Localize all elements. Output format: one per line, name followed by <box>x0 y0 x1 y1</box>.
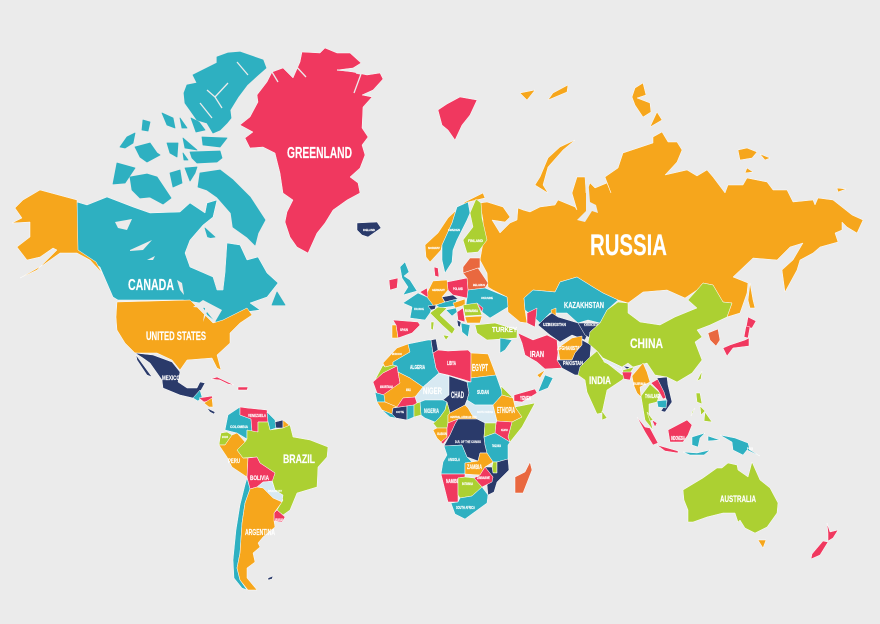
country: Norway: NORWAY <box>428 246 440 250</box>
country: Kyrgyzstan <box>578 323 600 338</box>
europe <box>389 193 508 340</box>
lake: Winnipeg <box>177 280 184 295</box>
country: China: CHINA <box>630 335 663 351</box>
country: Turkey: TURKEY <box>492 327 517 334</box>
country: Ireland <box>389 278 398 290</box>
country: Myanmar <box>632 363 650 397</box>
north america <box>12 52 285 414</box>
country: Syria <box>500 338 512 353</box>
country: Costa Rica <box>204 398 213 407</box>
country: Korea <box>708 329 720 346</box>
country: Uruguay: URUGUAY <box>275 518 283 522</box>
country: Panama <box>207 408 215 414</box>
fjords: Ellesmere <box>200 62 248 118</box>
country: Somalia <box>508 403 535 442</box>
country: Libya: LIBYA <box>447 361 456 367</box>
country: DR Congo: D.R. OF THE CONGO <box>455 439 481 444</box>
country: France <box>403 293 433 320</box>
country: Iran <box>518 333 562 369</box>
country: Denmark <box>434 267 439 277</box>
country: Liberia <box>382 410 396 418</box>
country: Australia: AUSTRALIA <box>720 494 756 505</box>
country: Taiwan <box>697 371 702 381</box>
country: Finland <box>463 199 487 253</box>
country: Morocco: MOROCCO <box>392 352 402 356</box>
country: Peru: PERU <box>228 459 240 465</box>
country: Mali <box>383 372 423 407</box>
country: Algeria: ALGERIA <box>410 365 425 371</box>
country: Malaysia peninsula <box>647 412 653 421</box>
country: Iran: IRAN <box>530 349 544 359</box>
country: Venezuela <box>240 407 268 432</box>
islands: Falklands <box>268 576 273 580</box>
country: Japan <box>723 317 756 356</box>
country: Bangladesh <box>622 372 632 380</box>
country: Greenland <box>240 48 383 253</box>
country: Greenland: GREENLAND <box>287 145 352 162</box>
country: Uzbekistan <box>538 313 588 342</box>
country: Myanmar: BURMA <box>633 381 646 386</box>
country: Australia <box>683 462 778 533</box>
country: Zambia: ZAMBIA <box>467 465 482 471</box>
country: Oman <box>538 375 553 392</box>
country: Guyana <box>267 412 276 430</box>
lake: Aral <box>551 308 556 316</box>
country: Italy <box>430 307 455 340</box>
country: Germany: GERMANY <box>432 288 445 292</box>
country: Bolivia <box>247 457 275 489</box>
country: Baltics <box>463 258 480 273</box>
country: Paraguay <box>257 481 283 502</box>
country: Indonesia <box>637 417 692 453</box>
country: Laos <box>651 379 668 399</box>
country: Turkey <box>475 323 517 340</box>
country: Tunisia <box>431 339 438 353</box>
country: Botswana <box>458 477 482 498</box>
country: Belarus: BELARUS <box>473 283 485 287</box>
country: Sudan <box>467 375 502 405</box>
country: Zambia <box>465 453 493 475</box>
country: Zimbabwe <box>474 467 493 487</box>
country: Pakistan: PAKISTAN <box>563 361 583 367</box>
country: Spain: SPAIN <box>400 328 408 332</box>
country: New Zealand <box>811 523 838 559</box>
country: Afghanistan: AFGHANISTAN <box>557 346 582 352</box>
country: Cameroon <box>433 402 450 428</box>
country: South Africa <box>451 487 488 519</box>
country: Madagascar <box>515 462 532 493</box>
country: Guinea <box>377 402 397 414</box>
country: Benin <box>414 402 421 417</box>
country: Zimbabwe: ZIMBABWE <box>477 476 490 480</box>
country: Thailand: THAILAND <box>645 394 660 400</box>
country: Yemen <box>514 389 537 402</box>
country: Mexico: MEXICO <box>162 375 180 382</box>
lake: Great Bear <box>115 219 132 230</box>
country: Colombia: COLOMBIA <box>230 424 248 429</box>
country: Namibia: NAMIBIA <box>446 479 460 485</box>
country: Mauritania: MAURITANIA <box>380 385 393 389</box>
country: Canada <box>77 197 278 323</box>
country: Svalbard <box>438 97 477 140</box>
country: China <box>588 283 732 382</box>
africa <box>373 339 553 519</box>
country: Sudan: SUDAN <box>477 390 489 396</box>
country: Iceland: ICELAND <box>363 229 375 232</box>
country: Cote d'Ivoire <box>392 406 407 420</box>
country: Kazakhstan: KAZAKHSTAN <box>564 301 604 310</box>
islands: eastern Indonesia and Papua <box>683 433 760 456</box>
country: Afghanistan <box>557 336 582 360</box>
country: Hungary <box>453 299 465 308</box>
country: Angola: ANGOLA <box>448 457 460 462</box>
country: Sri Lanka <box>602 411 607 420</box>
country: India <box>578 351 634 414</box>
country: Mozambique <box>485 459 509 495</box>
country: Western Sahara <box>373 365 397 382</box>
lake: Hudson Bay <box>186 237 227 290</box>
country: Portugal <box>392 325 398 338</box>
country: Niger: NIGER <box>423 386 442 397</box>
country: Malawi <box>492 462 497 473</box>
country: Nigeria: NIGERIA <box>424 409 439 415</box>
country: Suriname <box>275 420 283 428</box>
country: Brazil <box>237 422 328 515</box>
country: Venezuela: VENEZUELA <box>248 413 266 418</box>
country: Libya <box>433 350 471 382</box>
country: Ecuador: ECUADOR <box>222 435 228 439</box>
country: Spain <box>393 320 420 338</box>
country: India: INDIA <box>589 375 611 387</box>
country: Tanzania <box>484 433 510 462</box>
country: Moldova <box>477 303 483 312</box>
country: Ghana <box>407 405 414 420</box>
country: South Africa: SOUTH AFRICA <box>456 505 475 510</box>
country: Austria <box>436 299 457 308</box>
country: Chile <box>233 478 250 590</box>
country: Philippines <box>691 393 712 422</box>
country: Namibia <box>441 474 465 502</box>
country: Chad <box>443 376 469 413</box>
country: Niger <box>415 373 449 403</box>
country: Czech Republic <box>442 295 458 302</box>
country: Nigeria <box>420 400 447 422</box>
country: Uzbekistan: UZBEKISTAN <box>543 322 566 327</box>
country: Uruguay <box>274 510 285 522</box>
country: UAE <box>537 370 545 378</box>
country: Canada: CANADA <box>128 277 174 294</box>
country: Pakistan <box>557 340 591 375</box>
country: Serbia <box>457 308 465 322</box>
country: Burkina Faso <box>393 397 417 408</box>
country: Sweden: SWEDEN <box>448 228 460 232</box>
country: Ethiopia: ETHIOPIA <box>497 406 515 415</box>
country: Albania <box>457 320 461 327</box>
islands: eastern Indonesia and Papua: PNG <box>747 446 753 451</box>
country: Argentina: ARGENTINA <box>245 528 275 537</box>
country: Angola <box>441 445 472 474</box>
country: Morocco <box>383 344 410 367</box>
country: Chad: CHAD <box>451 390 464 400</box>
country: Russia: RUSSIA <box>590 229 667 262</box>
country: Russia <box>480 83 863 323</box>
country: Iceland <box>357 222 381 237</box>
country: Senegal <box>375 392 385 402</box>
country: Central African Republic: CENTRAL AFRICAN REP. <box>450 415 477 419</box>
country: Congo <box>441 419 458 444</box>
country: Uganda <box>484 423 496 437</box>
asia <box>475 277 760 456</box>
country: Bolivia: BOLIVIA <box>250 475 269 482</box>
country: Tanzania: TANZANIA <box>492 444 501 448</box>
country: Cote d'Ivoire: COTE <box>396 410 404 414</box>
islands: Canadian Arctic Archipelago <box>113 52 285 305</box>
country: Ethiopia <box>493 395 522 422</box>
country: Indonesia: INDONESIA <box>671 436 685 442</box>
country: DR Congo <box>444 419 487 461</box>
country: Ukraine: UKRAINE <box>481 296 493 300</box>
country: French Guiana <box>283 420 289 429</box>
country: Poland <box>447 278 468 298</box>
country: Bhutan <box>623 366 630 369</box>
country: Alaska <box>12 190 102 278</box>
country: Eritrea <box>501 386 513 398</box>
country: Ecuador <box>219 432 232 445</box>
country: France: FRANCE <box>414 307 424 311</box>
country: Finland: FINLAND <box>468 239 483 243</box>
country: Germany <box>426 280 448 306</box>
country: South Sudan: SOUTH SUDAN <box>477 410 493 414</box>
country: Yemen: YEMEN <box>520 396 531 402</box>
country: Greece <box>461 323 470 337</box>
country: Poland: POLAND <box>453 287 463 291</box>
country: Sweden <box>442 202 470 273</box>
country: Bulgaria <box>465 316 482 323</box>
country: United Kingdom <box>400 262 417 295</box>
country: Argentina <box>237 487 282 590</box>
country: Belarus <box>463 268 488 290</box>
country: Switzerland <box>428 305 436 310</box>
country: Thailand <box>641 384 660 430</box>
country: Gabon <box>433 428 447 442</box>
country: Colombia <box>225 407 252 439</box>
country: Mexico <box>135 353 205 398</box>
lake: Athabasca <box>147 256 155 260</box>
country: Botswana: BOTSWANA <box>462 482 473 486</box>
country: Guatemala <box>193 390 202 401</box>
country: Algeria <box>393 340 439 387</box>
country: Kazakhstan <box>524 277 618 323</box>
country: United States <box>116 300 252 370</box>
country: Egypt <box>471 353 496 378</box>
south america <box>219 407 328 590</box>
island: Tasmania <box>758 540 766 548</box>
country: Vietnam <box>657 377 672 412</box>
country: Ukraine <box>466 288 508 318</box>
country: Kyrgyzstan: KYRGYZSTAN <box>584 323 600 327</box>
country: Cambodia <box>657 400 667 408</box>
gulf: Ob <box>577 177 598 222</box>
lakes: Great Lakes <box>193 300 222 322</box>
caspian region <box>527 308 537 327</box>
country: Romania <box>463 303 482 316</box>
country: Mauritania <box>373 366 400 395</box>
country: Mali: MALI <box>406 388 411 392</box>
caribbean islands <box>211 377 248 390</box>
country: Kenya <box>495 421 512 442</box>
country: Brazil: BRAZIL <box>283 454 315 466</box>
country: Egypt: EGYPT <box>472 362 488 374</box>
country: Honduras <box>199 396 213 402</box>
country: Benelux <box>420 288 428 297</box>
country: South Sudan <box>465 400 497 423</box>
country: Gabon: GABON <box>437 431 447 436</box>
country: Paraguay: PARAGUAY <box>268 489 282 493</box>
country: United States: UNITED STATES <box>146 331 206 343</box>
country: Kenya: KENYA <box>501 428 509 432</box>
country: Central African Republic <box>448 405 477 423</box>
country: Peru <box>219 433 248 477</box>
country: Romania: ROMANIA <box>465 309 478 313</box>
country: Nepal <box>603 358 622 370</box>
lake: Great Slave <box>130 240 152 251</box>
country: Croatia <box>446 308 457 316</box>
country: Norway <box>425 193 485 262</box>
